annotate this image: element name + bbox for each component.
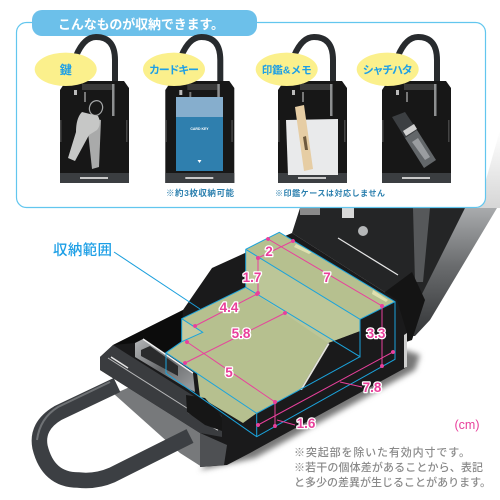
badge: カードキー — [149, 64, 199, 76]
item: key — [35, 37, 129, 183]
dimension labels: 2 — [265, 244, 273, 259]
shackle — [37, 382, 190, 480]
panel: storable items — [16, 10, 486, 208]
badge — [35, 53, 97, 86]
dimension labels: 7.8 — [363, 380, 382, 395]
dimension labels: 5 — [225, 365, 233, 380]
dimension labels: 1.6 — [297, 416, 316, 431]
drop shadow — [200, 350, 420, 470]
item: seal and memo — [256, 37, 385, 198]
dimension lines — [185, 239, 393, 426]
grey plate between shackle arms — [114, 386, 202, 467]
photo: open lock box — [37, 208, 497, 480]
callout: storage range — [53, 241, 200, 309]
badge: 鍵 — [60, 62, 72, 77]
dimension labels: 1.7 — [243, 270, 261, 285]
front latch plate — [186, 395, 222, 431]
title pill — [32, 10, 257, 36]
card: CARD KEY — [190, 127, 209, 131]
badge: 印鑑&メモ — [262, 64, 312, 76]
notes: ※突起部を除いた有効内寸です。 — [294, 445, 470, 459]
item: stamp — [357, 37, 451, 183]
memo pad — [286, 119, 338, 175]
dimension labels — [220, 244, 386, 431]
caption: ※約3枚収納可能 — [166, 188, 234, 198]
icon: keys — [68, 99, 105, 169]
notes — [294, 445, 491, 489]
title pill: こんなものが収納できます。 — [58, 17, 224, 32]
dimension labels: 7 — [323, 270, 331, 285]
callout: storage range: 収納範囲 — [53, 241, 112, 259]
panel frame — [16, 22, 486, 208]
lid and back panel — [292, 208, 497, 345]
caption: ※印鑑ケースは対応しません — [275, 188, 385, 198]
badge: シャチハタ — [363, 64, 413, 76]
base body — [100, 233, 407, 467]
stamp pen — [392, 112, 436, 168]
sliding latch — [135, 339, 195, 392]
badge — [256, 53, 318, 86]
storage area: green fill — [166, 232, 395, 423]
notes: と多少の差異が生じることがあります。 — [294, 475, 491, 489]
card — [176, 97, 223, 171]
badge — [143, 53, 205, 86]
unit label: (cm) — [454, 418, 480, 432]
seal — [295, 105, 313, 171]
lid fade behind panel — [478, 130, 500, 208]
dimension labels: 5.8 — [232, 326, 251, 341]
notes: ※若干の個体差があることから、表記 — [294, 460, 483, 474]
storage area: blue wireframe — [166, 232, 395, 437]
badge — [357, 53, 419, 86]
dimension labels: 3.3 — [367, 326, 386, 341]
dimension labels: 4.4 — [220, 300, 239, 315]
item: card key — [143, 37, 234, 198]
